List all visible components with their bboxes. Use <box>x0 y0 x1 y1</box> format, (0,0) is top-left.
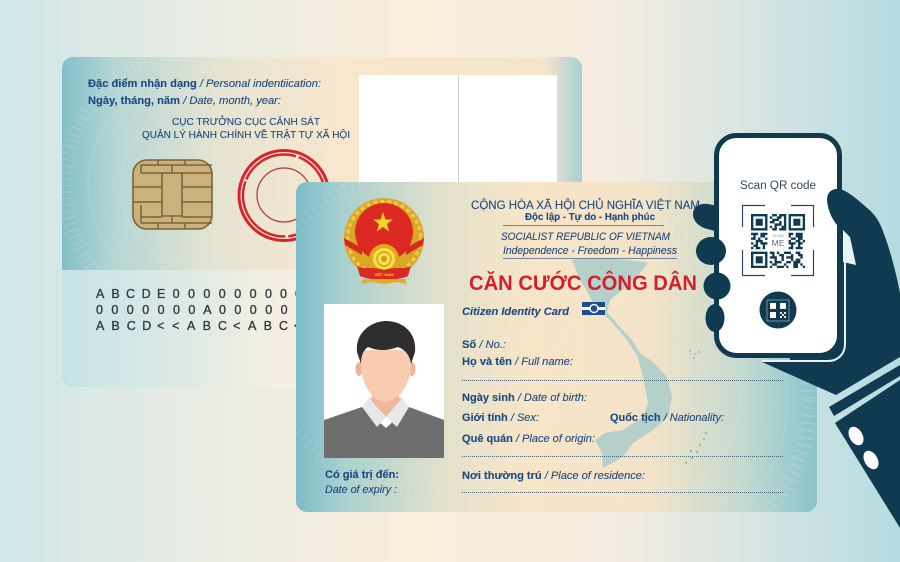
personal fields: Nơi thường trú / Place of residence: <box>462 470 645 482</box>
back card labels: CỤC TRƯỞNG CỤC CẢNH SÁT <box>172 115 320 128</box>
heading block: Độc lập - Tự do - Hạnh phúc <box>525 212 655 223</box>
QR frame brackets <box>742 206 814 276</box>
finger 1 <box>693 204 718 232</box>
personal fields: Quốc tịch / Nationality: <box>610 412 724 424</box>
national emblem <box>344 198 424 284</box>
phone heading: Scan QR code <box>740 180 816 192</box>
heading block: Independence - Freedom - Happiness <box>503 245 677 257</box>
icon: chip <box>133 160 212 229</box>
personal fields: Họ và tên / Full name: <box>462 356 573 368</box>
machine readable zone: 0000000A000000 <box>96 303 303 317</box>
map of Vietnam <box>572 258 672 468</box>
signature photo boxes <box>359 75 557 190</box>
machine readable zone: ABCD<<ABC<ABC< <box>96 319 301 333</box>
panel: front of card <box>296 182 817 512</box>
personal fields: Ngày sinh / Date of birth: <box>462 392 587 404</box>
thumb <box>827 189 866 240</box>
heading block <box>471 197 700 259</box>
hand holding phone <box>693 136 900 528</box>
islands <box>685 350 707 464</box>
icon: red stamp <box>239 150 329 240</box>
cuff <box>829 365 900 416</box>
expiry label: Date of expiry : <box>325 484 397 496</box>
finger 3 <box>704 272 730 300</box>
sleeve <box>835 380 900 528</box>
national emblem: VIỆT NAM <box>374 272 394 277</box>
machine readable strip background <box>62 270 296 387</box>
card watermark <box>62 65 126 270</box>
icon: scan button <box>760 292 796 328</box>
phone <box>716 136 840 356</box>
QR code <box>751 214 805 268</box>
phone edge highlight <box>762 262 845 361</box>
finger 4 <box>706 304 724 332</box>
portrait photo <box>324 304 444 458</box>
personal fields: Giới tính / Sex: <box>462 412 539 424</box>
card watermark <box>296 184 817 512</box>
machine readable zone: ABCDE000000000 <box>96 287 302 301</box>
expiry label <box>325 469 399 496</box>
expiry label: Có giá trị đến: <box>325 469 399 481</box>
QR centre label: SCAN <box>772 233 784 238</box>
heading block: SOCIALIST REPUBLIC OF VIETNAM <box>501 231 671 243</box>
finger 2 <box>696 237 726 265</box>
icon: chip symbol <box>582 302 605 315</box>
panel: back of card <box>62 50 582 387</box>
back card labels: Ngày, tháng, năm / Date, month, year: <box>88 95 281 107</box>
personal fields <box>462 339 784 492</box>
hand body <box>762 190 900 395</box>
back card labels <box>88 78 350 141</box>
QR centre label <box>772 233 785 248</box>
subtitle: Citizen Identity Card <box>462 306 569 318</box>
back card labels: QUẢN LÝ HÀNH CHÍNH VỀ TRẬT TỰ XÃ HỘI <box>142 128 350 141</box>
heading block: CỘNG HÒA XÃ HỘI CHỦ NGHĨA VIỆT NAM <box>471 197 700 212</box>
machine readable zone <box>96 287 303 333</box>
palm highlight <box>843 230 856 265</box>
personal fields: Số / No.: <box>462 339 506 351</box>
personal fields: Quê quán / Place of origin: <box>462 433 595 445</box>
QR centre label: ME <box>772 238 785 248</box>
title: CĂN CƯỚC CÔNG DÂN <box>469 271 697 295</box>
back card labels: Đặc điểm nhận dạng / Personal indentiication: <box>88 78 321 90</box>
